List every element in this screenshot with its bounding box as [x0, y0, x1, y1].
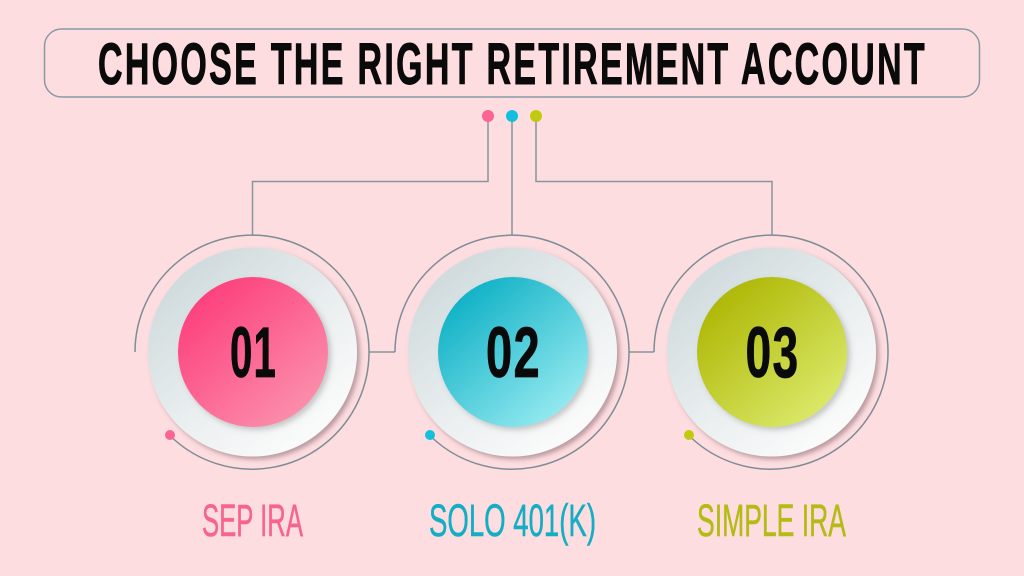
step 01 — [135, 235, 369, 469]
label: SEP IRA: SEP IRA — [202, 495, 303, 546]
step 02 — [395, 235, 629, 469]
connector lines from top dots — [252, 116, 772, 235]
label: SIMPLE IRA: SIMPLE IRA — [697, 495, 846, 546]
title box — [44, 29, 980, 97]
step 03 — [654, 235, 888, 469]
number 03: 03 — [746, 314, 800, 393]
number 01: 01 — [230, 314, 277, 393]
top dots — [482, 110, 542, 122]
number 02: 02 — [486, 314, 541, 393]
links between circles — [369, 351, 654, 353]
label: SOLO 401(K): SOLO 401(K) — [429, 495, 596, 546]
